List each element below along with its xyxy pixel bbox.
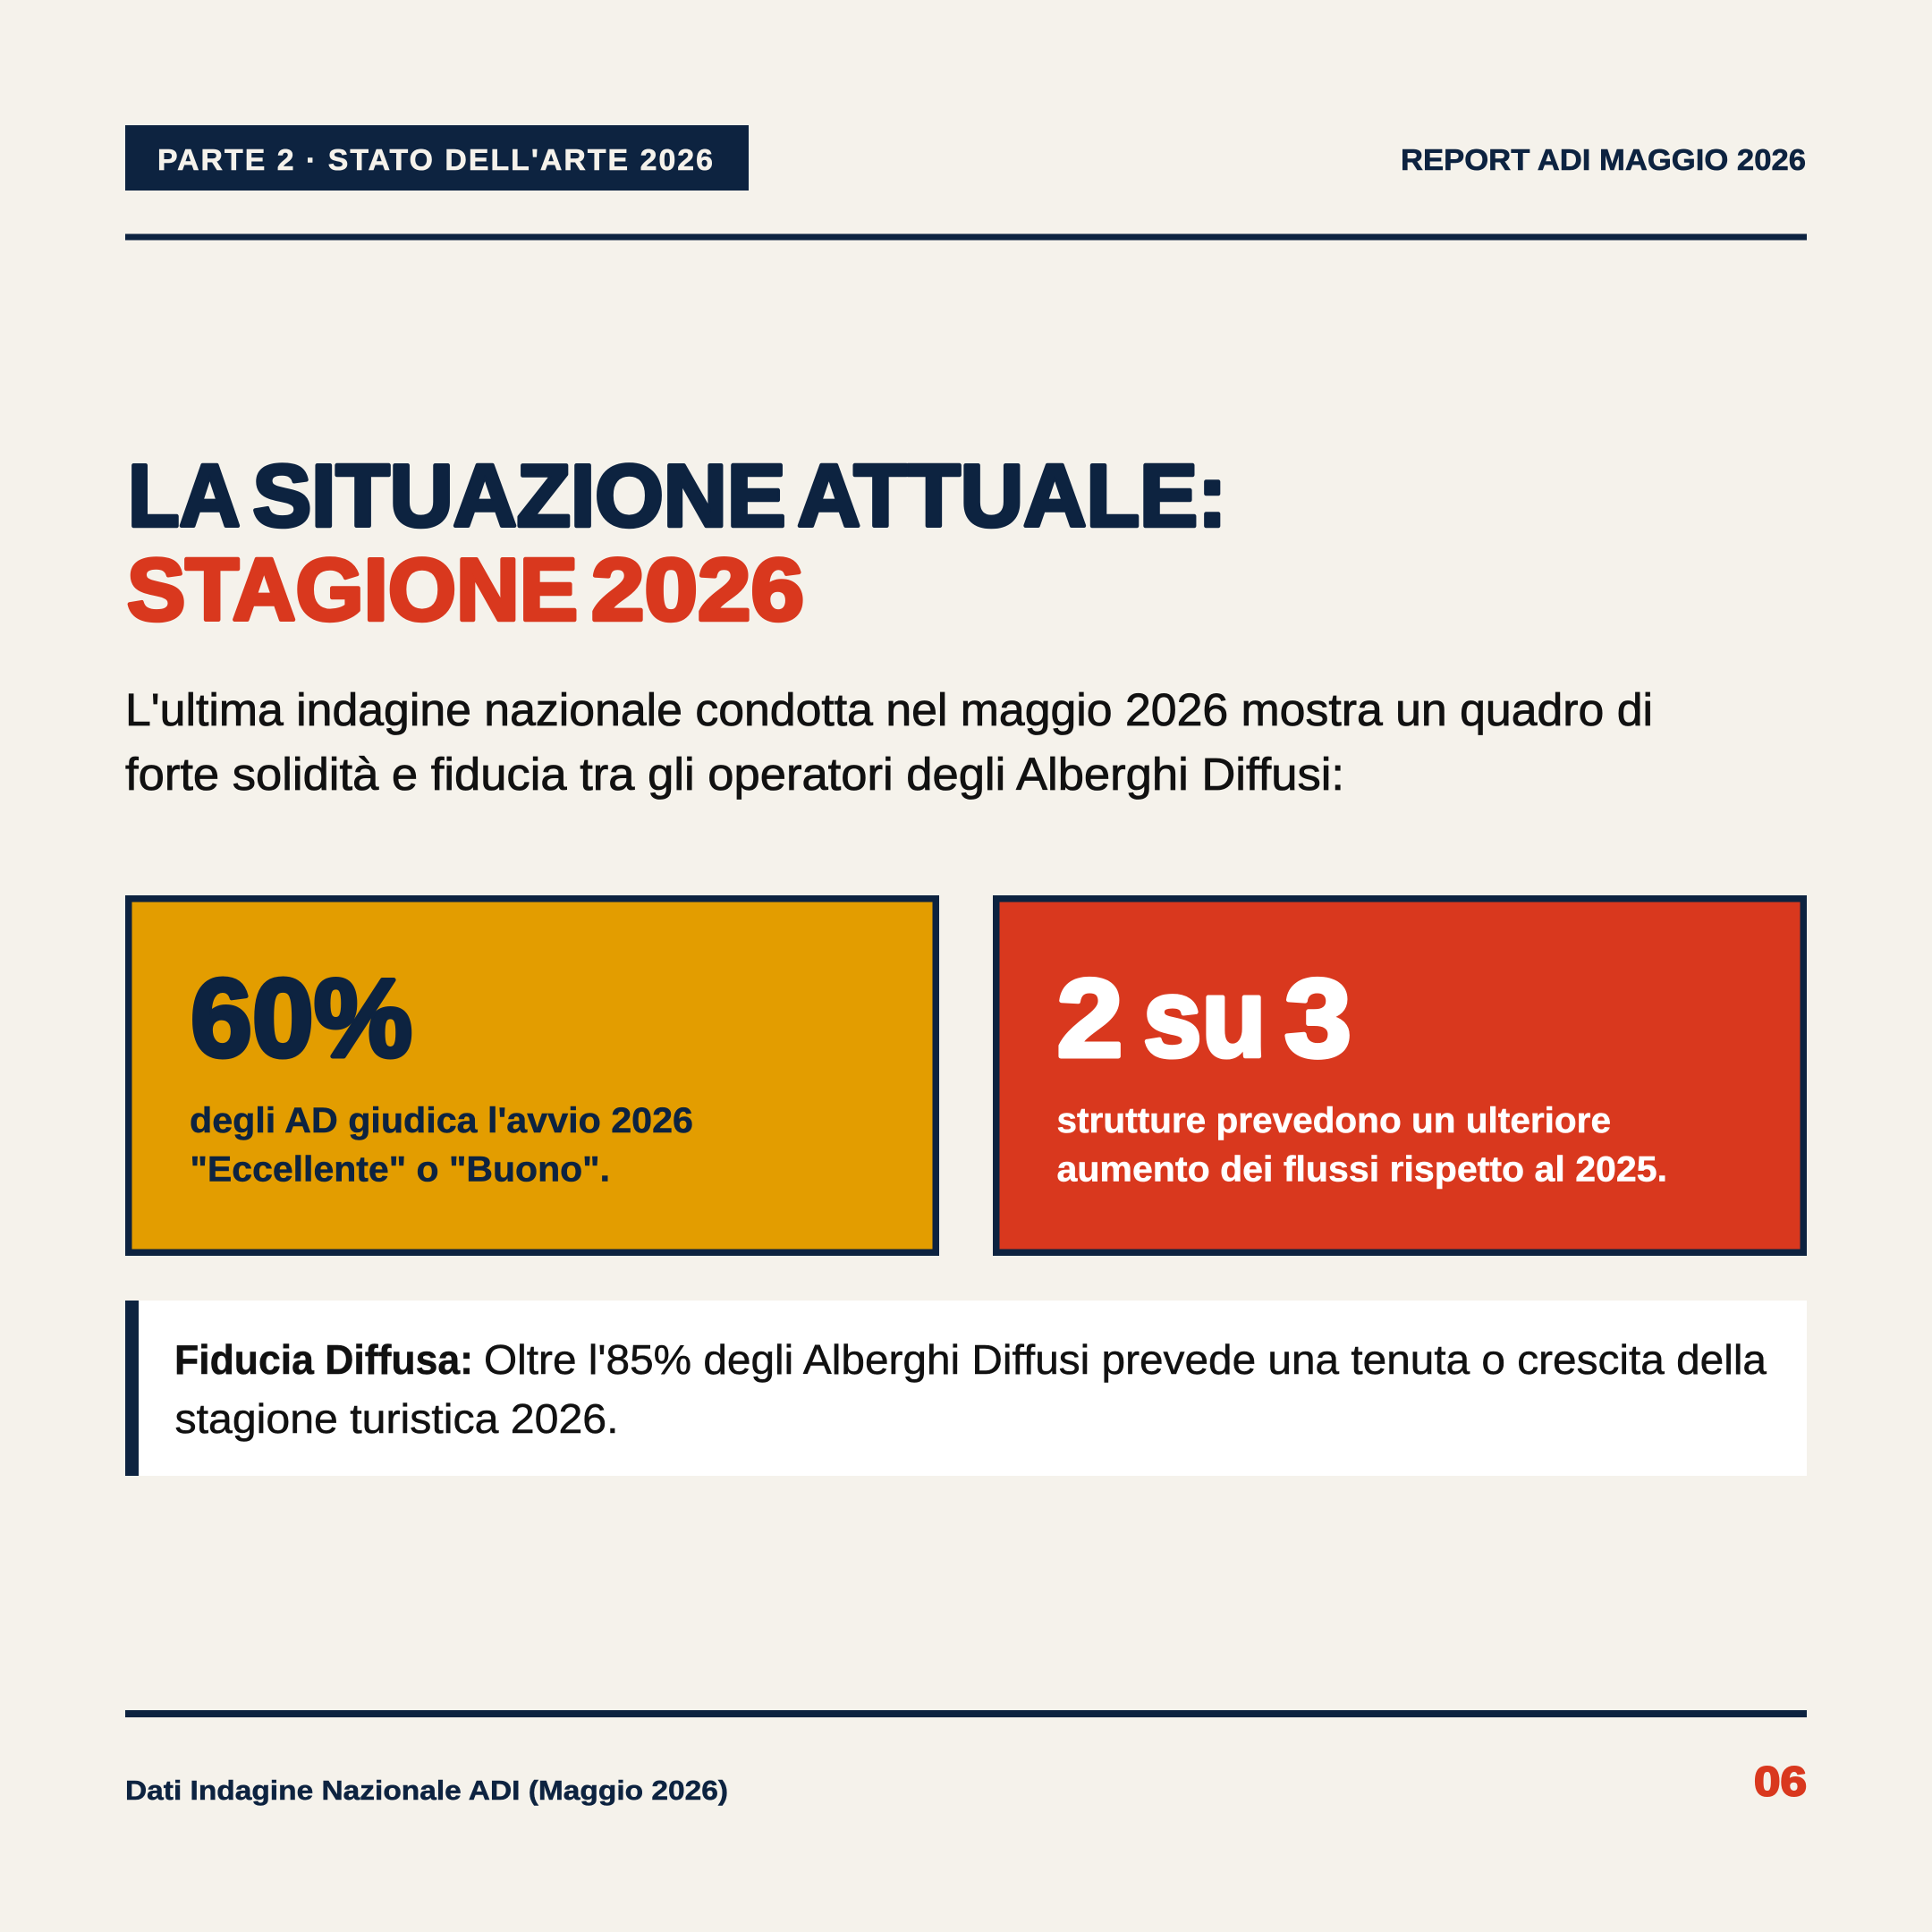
footer [125,1710,1807,1806]
panel: 2 su 3 [996,899,1803,1252]
callout: fiducia diffusa [125,1301,1807,1476]
title line 2: STAGIONE [127,540,578,639]
badge: parte 2: PARTE 2 · STATO DELL'ARTE 2026 [157,143,715,176]
title [127,446,1227,639]
description: 60%: degli AD giudica l'avvio 2026 [190,1101,693,1140]
title line 2: 2026 [591,540,804,639]
intro paragraph: L'ultima indagine nazionale condotta nel maggio 2026 mostra un quadro di [125,684,1653,735]
stat: 60%: 60% [191,957,412,1080]
panel: 60% [129,899,936,1252]
title line 1: ATTUALE: [798,446,1227,545]
description: 2 su 3: aumento dei flussi rispetto al 2025. [1057,1150,1667,1190]
intro paragraph [125,684,1653,800]
intro paragraph: forte solidità e fiducia tra gli operatori degli Alberghi Diffusi: [125,749,1344,800]
description: 60% [190,1101,693,1190]
report label: REPORT ADI MAGGIO 2026 [1401,143,1806,176]
title line 1: LA [128,446,239,545]
stat: 2 su 3: 2 [1057,957,1123,1080]
page number: 06 [1754,1758,1807,1805]
description: 2 su 3: strutture prevedono un ulteriore [1057,1101,1611,1140]
header [125,125,1807,240]
description: 60%: "Eccellente" o "Buono". [190,1150,610,1190]
stat: 2 su 3: su [1143,957,1267,1080]
description: 2 su 3 [1057,1101,1667,1190]
title line 1: SITUAZIONE [252,446,785,545]
callout text [174,1336,1767,1442]
callout text: Oltre l'85% degli Alberghi Diffusi prevede una tenuta o crescita della [484,1336,1767,1383]
badge: parte 2 [125,125,749,191]
footer source: Dati Indagine Nazionale ADI (Maggio 2026) [125,1775,728,1806]
callout text: Fiducia Diffusa: [174,1336,473,1383]
stat: 2 su 3: 3 [1284,957,1352,1080]
callout text: stagione turistica 2026. [175,1395,619,1442]
